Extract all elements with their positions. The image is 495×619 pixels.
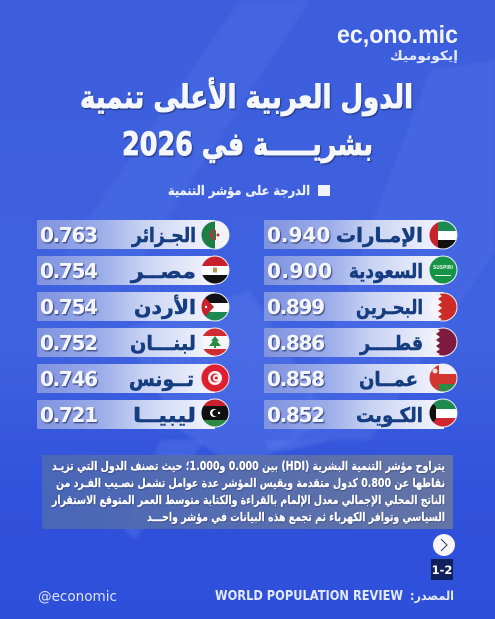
row: Oman: 0.858 [267,367,325,391]
row: Egypt: 0.754 [40,259,98,283]
icon: Egypt flag [201,256,229,284]
source: WORLD POPULATION REVIEW [215,589,403,604]
icon: Saudi flag: SUSPIRI [433,265,453,271]
row: Kuwait: 0.852 [267,403,325,427]
logo: إيكونوميك [390,49,458,64]
source: المصدر: [410,588,454,603]
handle: @economic [38,589,117,605]
row: Libya [37,400,215,429]
row: Jordan [37,292,215,321]
row: Saudi Arabia: 0.900 [267,259,332,283]
logo: ec,ono.mic [337,21,458,49]
icon: Saudi flag [429,256,457,284]
panel: explanatory text: يتراوح مؤشر التنمية البشرية (HDI) بين 0.000 و1.000؛ حيث تصنف الدول التي تزيـد [52,459,445,474]
row: UAE [264,220,444,249]
icon: Libya flag [201,399,229,427]
panel: left column ranking [37,220,215,429]
row: Libya: ليبيــا [133,403,196,427]
logo [337,21,458,64]
row: Oman [264,364,444,393]
page badge [431,559,453,580]
title: بشريـــــة في 2026 [122,125,373,163]
icon: Algeria flag [201,221,229,249]
title: الدول العربية الأعلى تنمية [80,77,413,116]
icon: Jordan flag [201,293,229,321]
row: Algeria [37,220,215,249]
row: Egypt [37,256,215,285]
row: Kuwait: الكـويت [356,403,423,427]
row: Qatar: 0.886 [267,331,325,355]
row: Kuwait [264,400,444,429]
row: Qatar: قطــــر [359,331,423,355]
row: Tunisia [37,364,215,393]
panel: explanatory text [42,455,453,529]
icon: Qatar flag [436,328,458,356]
icon: Kuwait flag [429,399,457,427]
row: Jordan: 0.754 [40,295,98,319]
icon: Tunisia flag [201,364,229,392]
row: Lebanon: 0.752 [40,331,98,355]
row: Saudi Arabia [264,256,444,285]
icon: Oman flag [429,364,457,392]
row: UAE: 0.940 [267,223,330,247]
row: Egypt: مصــر [130,259,196,283]
row: Tunisia: تــونس [129,367,194,391]
row: Bahrain: البحـرين [356,295,423,319]
row: Algeria: 0.763 [40,223,98,247]
icon: next arrow [433,534,455,556]
row: Algeria: الجـزائر [131,223,196,247]
title [80,77,413,163]
row: Qatar [264,328,444,357]
row: Bahrain [264,292,444,321]
row: Libya: 0.721 [40,403,98,427]
row: UAE: الإمـارات [336,223,423,247]
row: Bahrain: 0.899 [267,295,325,319]
row: Lebanon: لبنـــان [130,331,196,355]
icon: UAE flag [429,221,457,249]
panel: right column ranking [264,220,444,429]
legend: الدرجة على مؤشر التنمية [168,184,310,199]
icon: Lebanon flag [201,328,229,356]
row: Tunisia: 0.746 [40,367,98,391]
page badge: 1-2 [432,563,452,577]
row: Oman: عمــان [359,367,418,391]
row: Saudi Arabia: السعودية [349,259,423,283]
panel: explanatory text: نقاطها عن 0.800 كدول متقدمة ويقيس المؤشر عدة عوامل تشمل نصـيب الفـرد من [56,476,445,491]
icon: Bahrain flag [436,292,458,322]
row: Jordan: الأردن [134,294,196,319]
row: Lebanon [37,328,215,357]
